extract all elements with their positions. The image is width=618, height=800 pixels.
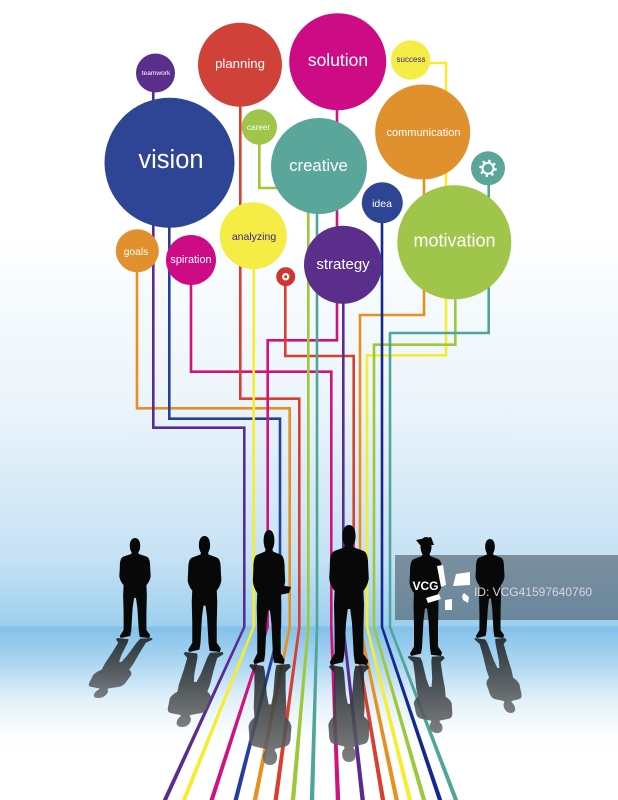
connector lines [137,61,489,627]
floor shadows of figures [79,638,528,765]
circle: analyzing: analyzing [232,231,276,243]
circle: success: success [397,55,425,64]
circle: teamwork [136,54,175,92]
circle: analyzing [220,202,287,269]
circle: solution [289,13,386,110]
circle: planning: planning [215,56,265,71]
figure: person 3 [253,530,291,664]
circle: motivation [397,185,511,299]
figure: person 5 [410,537,442,656]
figure: person 4 [329,525,369,665]
figure: person 6 [475,539,505,638]
circle: idea: idea [372,198,392,210]
circle: planning [198,23,282,107]
circle: career: career [247,123,270,132]
circle: strategy: strategy [316,256,370,273]
circle: idea [362,182,403,223]
circle: target icon [276,267,295,286]
circle: communication [375,84,470,180]
circle: gear icon [471,151,505,185]
figure: person 1 [119,538,151,638]
watermark id text: ID: VCG41597640760 [474,585,592,599]
circle: goals: goals [124,247,148,258]
circle: success [391,40,430,80]
figure: person 2 [188,536,221,652]
circle: spiration [166,235,216,285]
circle: spiration: spiration [170,254,212,266]
circle: teamwork: teamwork [142,70,171,77]
circle: solution: solution [308,50,368,70]
circle: strategy [304,226,382,304]
circle: vision [104,98,234,228]
circle: communication: communication [387,127,460,139]
circle: creative [271,118,367,214]
circle: creative: creative [289,156,348,175]
circle: goals [116,229,159,272]
watermark logo: VCG [412,579,439,593]
watermark band [395,555,618,620]
floor perspective lines [163,627,458,800]
circle: motivation: motivation [413,230,496,250]
watermark logo [412,565,470,610]
circle: career [242,109,277,145]
circle: vision: vision [138,146,204,174]
